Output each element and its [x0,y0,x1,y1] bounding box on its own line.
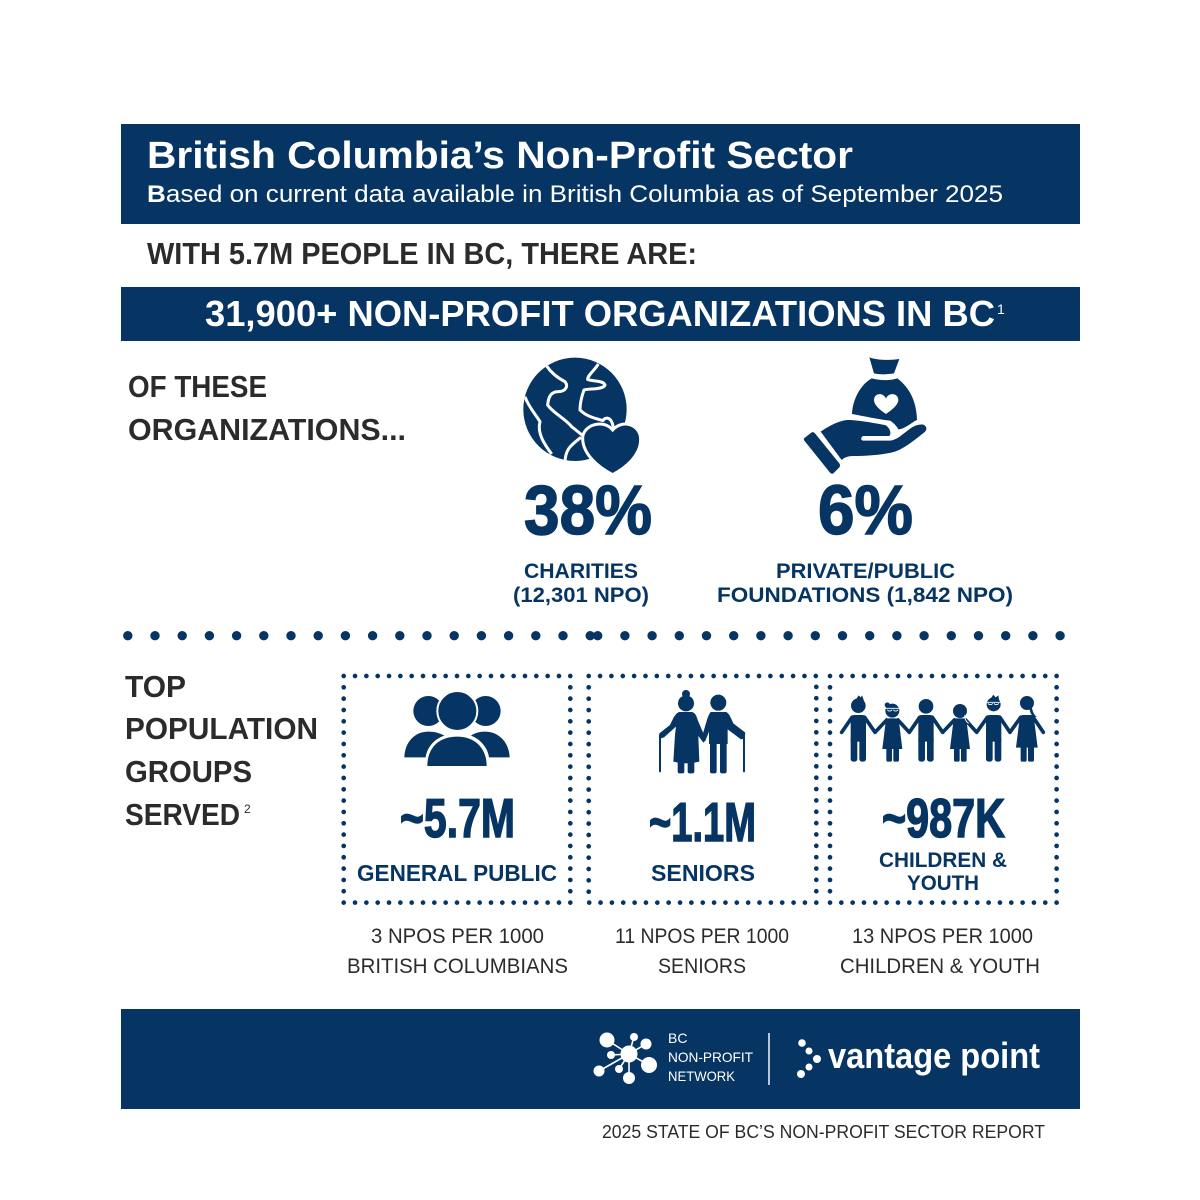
label: children and youth: YOUTH [907,872,979,895]
text: seniors ratio: 11 NPOS PER 1000 [615,925,789,948]
icon: Vantage Point dots [797,1039,821,1078]
icon: BC Non-Profit Network logo [594,1032,657,1084]
title: British Columbia’s Non-Profit Sector [147,135,853,177]
icon: group of people [404,691,510,766]
panel: total organizations banner: 1 [997,301,1005,317]
text: children and youth ratio: CHILDREN & YOUTH [840,955,1040,978]
text: general public ratio: 3 NPOS PER 1000 [371,925,544,948]
subtitle: Based on current data available in British Columbia as of September 2025 [147,181,1003,208]
text: children and youth ratio [840,925,1040,978]
panel: general public [344,676,570,903]
heading: top population groups served: 2 [244,802,251,816]
panel: seniors [589,676,816,903]
heading: of these organizations [128,369,406,447]
panel: children and youth [830,676,1057,903]
text: network name: BC [668,1030,687,1046]
heading: top population groups served: GROUPS [125,754,252,789]
panel: total organizations banner: 31,900+ NON-PROFIT ORGANIZATIONS IN BC [205,293,995,334]
text: network name: NON-PROFIT [668,1049,753,1065]
label: foundations [717,560,1013,607]
text: general public ratio [347,925,568,978]
text: report source: 2025 STATE OF BC’S NON-PROFIT SECTOR REPORT [602,1122,1045,1142]
heading: population statement: WITH 5.7M PEOPLE IN BC, THERE ARE: [147,236,697,271]
label: children and youth: CHILDREN & [879,849,1007,872]
stat: children and youth count: ~987K [882,787,1005,849]
stat: seniors count: ~1.1M [649,791,756,853]
panel: footer banner with logos [121,1009,1080,1109]
label: general public: GENERAL PUBLIC [357,860,557,886]
heading: top population groups served [125,669,318,832]
icon: children holding hands [842,695,1043,762]
stat: 6 percent: 6% [818,471,913,549]
heading: top population groups served: SERVED [125,797,240,832]
heading: of these organizations: OF THESE [128,369,267,404]
label: children and youth [879,849,1007,895]
panel: total organizations banner [121,287,1080,341]
icon: elderly couple [659,690,745,773]
stat: 38 percent: 38% [524,471,652,549]
heading: of these organizations: ORGANIZATIONS... [128,412,406,447]
text: general public ratio: BRITISH COLUMBIANS [347,955,568,978]
text: children and youth ratio: 13 NPOS PER 1000 [852,925,1033,948]
label: foundations: PRIVATE/PUBLIC [776,560,955,583]
icon: globe with heart [523,358,641,475]
panel: header banner [121,124,1080,224]
label: charities: CHARITIES [524,560,638,583]
label: charities: (12,301 NPO) [513,584,649,607]
heading: top population groups served: TOP [125,669,186,704]
stat: general public count: ~5.7M [400,787,515,849]
text: seniors ratio: SENIORS [658,955,746,978]
icon: hand holding money bag [804,357,926,474]
label: seniors: SENIORS [651,860,755,886]
text: network name [668,1030,753,1084]
label: charities [513,560,649,607]
label: foundations: FOUNDATIONS (1,842 NPO) [717,584,1013,607]
text: network name: NETWORK [668,1068,736,1084]
heading: top population groups served: POPULATION [125,711,318,746]
text: seniors ratio [615,925,789,978]
text: vantage point logo: vantage point [828,1035,1040,1076]
